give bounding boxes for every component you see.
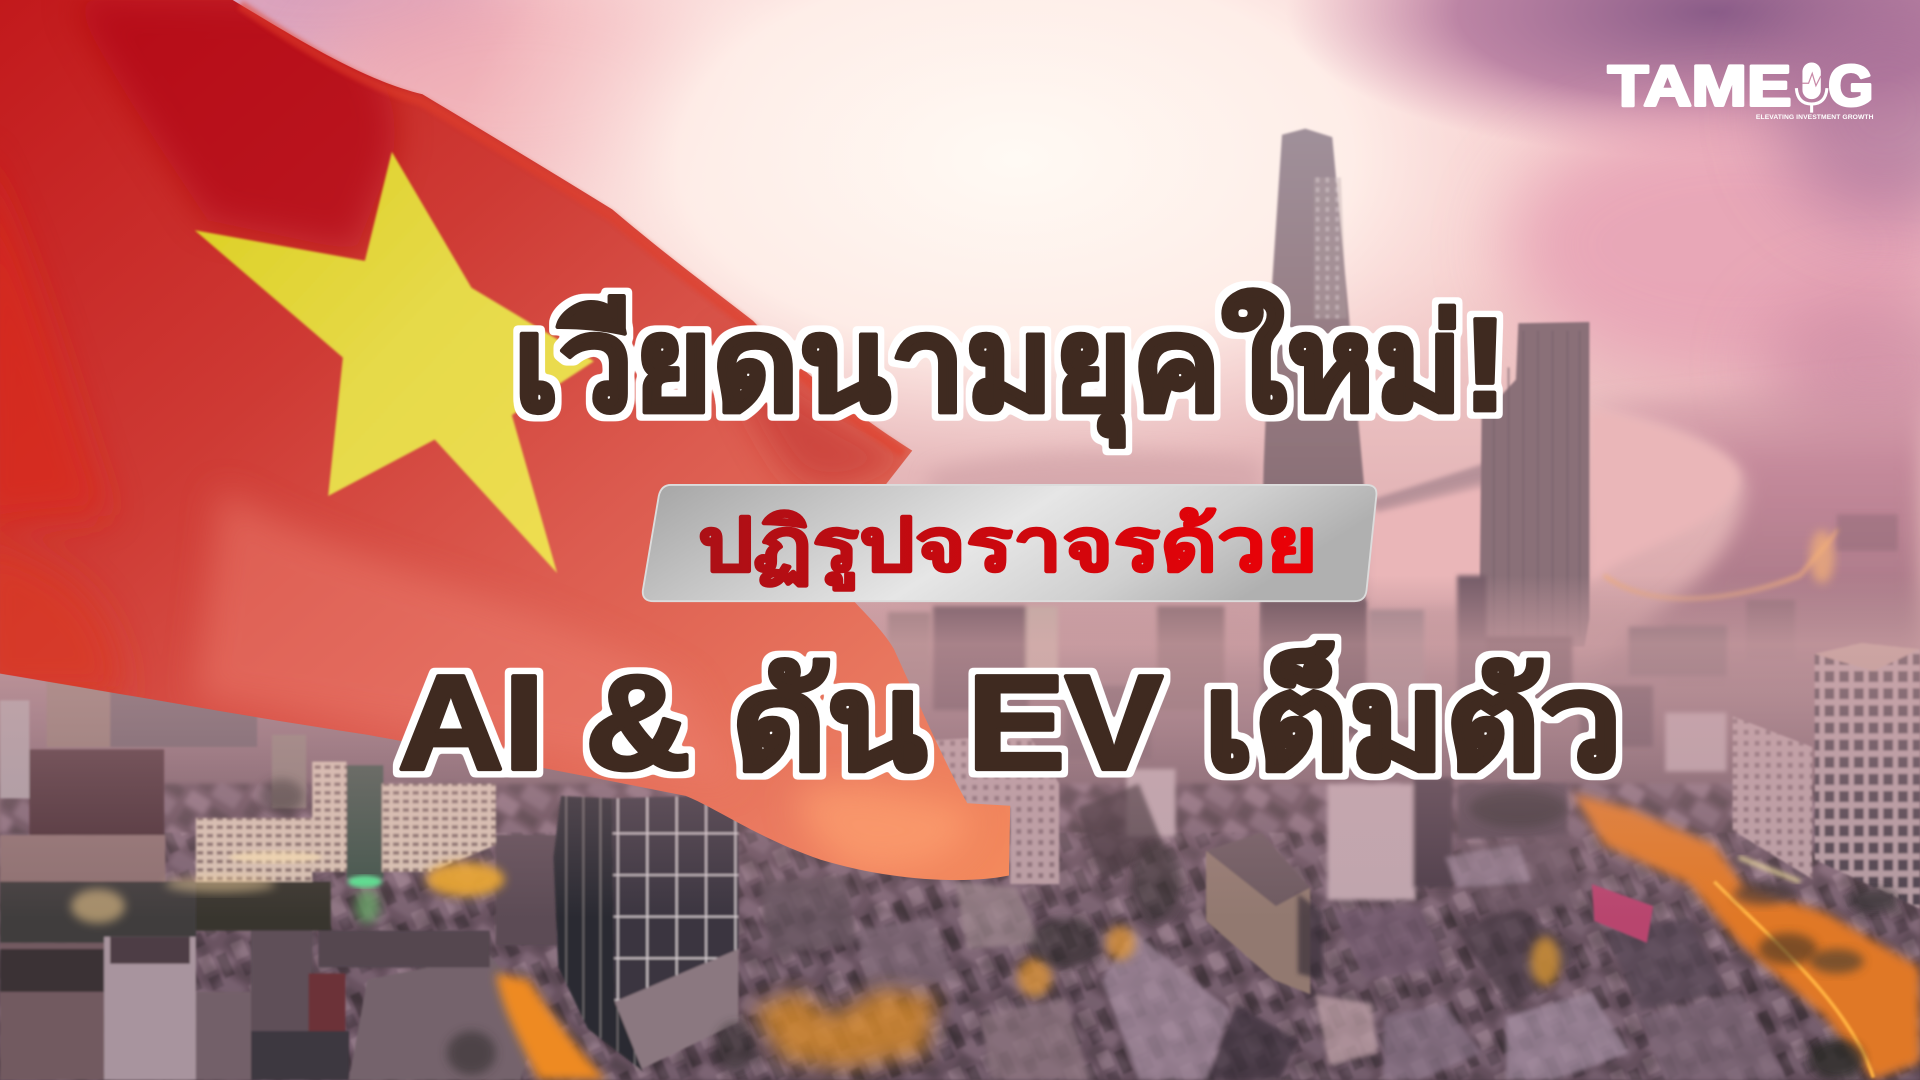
flag: yellow star [195, 152, 594, 573]
flag: Vietnam red flag [0, 0, 1010, 880]
logo: TAMEIG: TAME [1608, 54, 1791, 118]
left district: pale buildings [0, 680, 557, 1080]
logo tagline: ELEVATING INVESTMENT GROWTH [1756, 114, 1874, 121]
logo letter G: G [1828, 54, 1873, 118]
icon: microphone [1796, 62, 1827, 113]
logo: TAMEIG [1608, 54, 1874, 121]
subtitle pill [643, 485, 1376, 601]
building: pale windowed block [924, 735, 1059, 884]
dark tree clusters [260, 779, 1567, 1075]
background: twin tower block [1479, 322, 1589, 647]
street lights: orange glows [71, 793, 1920, 1080]
building: right mid-rise [1733, 716, 1812, 879]
building: glass grid tower [553, 796, 738, 1071]
title line 2: AI & ดัน EV เต็มตัว [398, 642, 1622, 798]
background: lower city [0, 576, 1920, 1080]
mid-distance buildings [888, 576, 1727, 771]
title line 1: เวียดนามยุคใหม่! [513, 289, 1507, 447]
building: brown tower block [1206, 833, 1310, 994]
background: Bitexco tower [1259, 129, 1367, 667]
building: right high-rise [1815, 643, 1920, 909]
central pale buildings [1127, 769, 1567, 900]
subtitle text: ปฏิรูปจราจรด้วย [698, 504, 1318, 592]
background: river [1369, 410, 1739, 606]
flag: folds and shading [0, 0, 969, 870]
background: distant riverside city [906, 367, 1920, 686]
flag: bright edge band [240, 5, 904, 453]
rooftops: central and right low-rise district [759, 784, 1788, 1080]
